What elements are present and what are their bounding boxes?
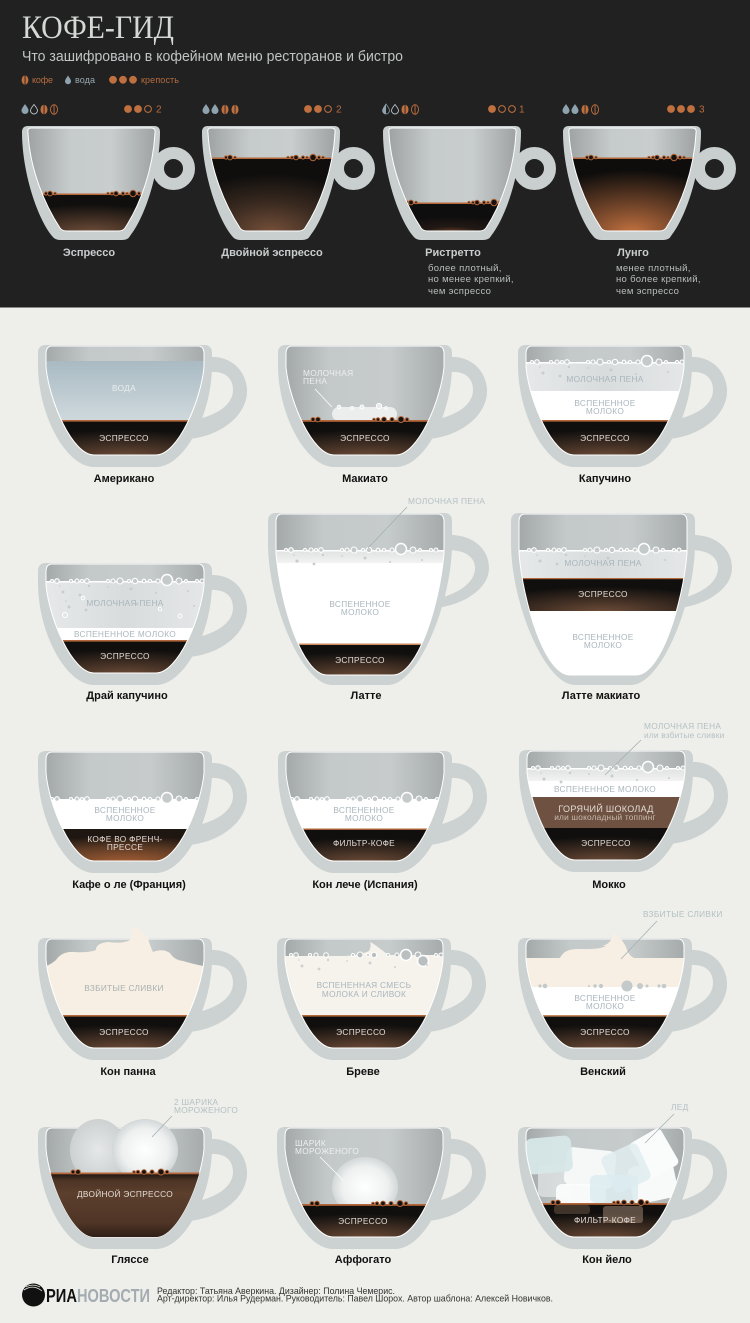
cup: Лунго: [562, 104, 730, 297]
callout: шарик мороженого: ШАРИК: [295, 1138, 326, 1148]
callout: лед: [645, 1102, 689, 1143]
cup drawing: [563, 126, 730, 240]
cup: Аффогато: [277, 1127, 486, 1266]
cup drawing: [511, 513, 732, 685]
callout: молочная пена: МОЛОЧНАЯ ПЕНА: [408, 496, 485, 506]
legend: вода: [75, 75, 95, 85]
footer credits: Арт-директор: Илья Рудерман. Руководитель: Павел Шорох. Автор шаблона: Алексей Новичков.: [157, 1294, 553, 1304]
footer credits: Редактор: Татьяна Аверкина. Дизайнер: Полина Чемерис.: [157, 1286, 395, 1297]
footer logo: НОВОСТИ: [77, 1286, 150, 1306]
layer label: ФИЛЬТР-КОФЕ: [574, 1215, 636, 1225]
name: Лунго: [617, 247, 649, 259]
callout: шарик мороженого: МОРОЖЕНОГО: [295, 1146, 359, 1156]
layer labels: ВСПЕНЕННОЕ МОЛОКО: [74, 629, 176, 639]
cup: Кон йело: [518, 1102, 727, 1266]
title: КОФЕ-ГИД: [22, 10, 174, 46]
layer labels: ВСПЕНЕННОЕ: [94, 805, 156, 815]
legend: кофе: [32, 75, 53, 85]
cup drawing: [277, 938, 486, 1060]
cup drawing: [278, 751, 487, 873]
name: Аффогато: [335, 1254, 391, 1266]
layer labels: КОФЕ ВО ФРЕНЧ-: [87, 834, 163, 844]
cup drawing: [38, 751, 247, 873]
callout: взбитые сливки: [621, 909, 723, 959]
layer labels: [87, 805, 163, 852]
cup: Бреве: [277, 938, 486, 1078]
cup drawing: [38, 1119, 247, 1249]
name: Эспрессо: [63, 247, 115, 259]
callout: шарик мороженого: [295, 1138, 359, 1180]
layer labels: ГОРЯЧИЙ ШОКОЛАД: [558, 803, 654, 814]
name: Латте макиато: [562, 690, 641, 702]
callout: молочная пена или взбитые сливки: или взбитые сливки: [644, 730, 725, 740]
strength rating: 3: [699, 104, 705, 116]
ingredient icons: [382, 104, 418, 114]
description: менее плотный,: [616, 263, 691, 274]
layer labels: ЭСПРЕССО: [100, 651, 150, 661]
name: Бреве: [346, 1066, 380, 1078]
description: чем эспрессо: [428, 286, 491, 297]
cup drawing: [268, 513, 489, 685]
cup: Драй капучино: [38, 563, 247, 702]
layer labels: МОЛОКО: [584, 640, 622, 650]
layer labels: или шоколадный топпинг: [554, 812, 656, 822]
legend: [22, 75, 179, 85]
description: [616, 263, 701, 297]
callout: молочная пена или взбитые сливки: МОЛОЧНАЯ ПЕНА: [644, 721, 721, 731]
layer labels: [554, 784, 656, 848]
layer labels: [99, 383, 149, 443]
callout: молочная пена: [303, 368, 353, 407]
layer labels: МОЛОКО: [106, 813, 144, 823]
name: Драй капучино: [86, 690, 168, 702]
footer logo: РИА: [46, 1286, 77, 1306]
layer labels: МОЛОКО: [586, 1001, 624, 1011]
strength rating: 2: [156, 104, 162, 116]
callout: молочная пена: МОЛОЧНАЯ: [303, 368, 353, 378]
layer labels: ВСПЕНЕННОЕ: [329, 599, 391, 609]
ingredient icons: [562, 104, 598, 114]
ice cubes: [525, 1127, 680, 1223]
description: [428, 263, 514, 297]
cup: Кон панна: [38, 926, 247, 1078]
layer labels: ВСПЕНЕННОЕ: [574, 398, 636, 408]
layer labels: [84, 983, 164, 1037]
layer labels: ЭСПРЕССО: [99, 1027, 149, 1037]
description: более плотный,: [428, 263, 502, 274]
name: Кон йело: [582, 1254, 632, 1266]
layer labels: ВСПЕНЕННОЕ: [574, 993, 636, 1003]
layer labels: МОЛОКА И СЛИВОК: [322, 989, 406, 999]
ice cream balls: [70, 1119, 178, 1181]
cream peak above rim: [603, 933, 624, 946]
strength rating: [304, 104, 342, 116]
name: Венский: [580, 1066, 626, 1078]
layer label: ЭСПРЕССО: [338, 1216, 388, 1226]
layer labels: [317, 980, 412, 1037]
layer labels: МОЛОЧНАЯ ПЕНА: [566, 374, 644, 384]
layer labels: [564, 558, 642, 650]
layer labels: ЭСПРЕССО: [336, 1027, 386, 1037]
callout: молочная пена: [368, 496, 485, 548]
strength rating: [667, 104, 705, 116]
layer labels: ПРЕССЕ: [107, 842, 143, 852]
layer labels: ЭСПРЕССО: [580, 433, 630, 443]
cup drawing: [518, 345, 727, 467]
footer logo: [22, 1284, 150, 1306]
layer labels: ВСПЕНЕННОЕ: [572, 632, 634, 642]
callout: 2 шарика мороженого: [152, 1097, 238, 1137]
strength rating: [488, 104, 525, 116]
layer labels: МОЛОЧНАЯ ПЕНА: [564, 558, 642, 568]
layer labels: ЭСПРЕССО: [335, 655, 385, 665]
name: Латте: [350, 690, 382, 702]
name: Кафе о ле (Франция): [72, 879, 186, 891]
callout: молочная пена или взбитые сливки: [605, 721, 725, 775]
cup: Эспрессо: [22, 104, 189, 259]
name: Гляссе: [111, 1254, 149, 1266]
cup: Кон лече: [278, 751, 487, 891]
ingredient icons: [202, 104, 238, 114]
cup: Латте: [268, 496, 489, 702]
name: Кон лече (Испания): [312, 879, 418, 891]
layer labels: [333, 805, 395, 848]
footer credits: [157, 1286, 553, 1304]
layer labels: МОЛОКО: [341, 607, 379, 617]
strength rating: 1: [519, 104, 525, 116]
layer labels: ВОДА: [112, 383, 136, 393]
cream peak above rim: [122, 926, 148, 942]
cup: Ристретто: [382, 104, 550, 297]
cup drawing: [383, 126, 550, 240]
cup: Американо: [38, 345, 247, 485]
legend: крепость: [141, 75, 179, 85]
name: Американо: [94, 473, 155, 485]
cup: Кафе о ле: [38, 751, 247, 891]
layer labels: ВСПЕНЕННОЕ МОЛОКО: [554, 784, 656, 794]
callout: 2 шарика мороженого: 2 ШАРИКА: [174, 1097, 218, 1107]
name: Двойной эспрессо: [221, 247, 323, 259]
cup: Латте макиато: [511, 513, 732, 702]
layer label: ДВОЙНОЙ ЭСПРЕССО: [77, 1188, 173, 1199]
name: Мокко: [592, 879, 626, 891]
layer labels: ВСПЕНЕННАЯ СМЕСЬ: [317, 980, 412, 990]
callout: лед: ЛЕД: [671, 1102, 689, 1112]
cup drawing: [38, 345, 247, 467]
layer labels: ЭСПРЕССО: [99, 433, 149, 443]
callout: 2 шарика мороженого: МОРОЖЕНОГО: [174, 1105, 238, 1115]
description: но менее крепкий,: [428, 274, 514, 285]
layer labels: [566, 374, 644, 443]
cup drawing: [278, 345, 487, 467]
cup drawing: [38, 563, 247, 685]
strength rating: [124, 104, 162, 116]
layer labels: ВЗБИТЫЕ СЛИВКИ: [84, 983, 164, 993]
description: чем эспрессо: [616, 286, 679, 297]
dark header panel: [0, 0, 750, 308]
cup: Венский: [518, 909, 727, 1078]
layer labels: [329, 599, 391, 665]
cup drawing: [519, 750, 728, 872]
layer labels: ЭСПРЕССО: [580, 1027, 630, 1037]
cup drawing: [518, 933, 727, 1060]
strength rating: 2: [336, 104, 342, 116]
cup drawing: [277, 1127, 486, 1249]
layer labels: МОЛОКО: [586, 406, 624, 416]
description: но более крепкий,: [616, 274, 701, 285]
callout: молочная пена: ПЕНА: [303, 376, 327, 386]
layer labels: МОЛОЧНАЯ ПЕНА: [86, 598, 164, 608]
callout: взбитые сливки: ВЗБИТЫЕ СЛИВКИ: [643, 909, 723, 919]
name: Капучино: [579, 473, 631, 485]
layer labels: ЭСПРЕССО: [581, 838, 631, 848]
name: Ристретто: [425, 247, 481, 259]
cup drawing: [22, 126, 189, 240]
cup: Капучино: [518, 345, 727, 485]
cup: Макиато: [278, 345, 487, 485]
layer labels: ЭСПРЕССО: [578, 589, 628, 599]
layer labels: ФИЛЬТР-КОФЕ: [333, 838, 395, 848]
layer labels: ВСПЕНЕННОЕ: [333, 805, 395, 815]
cup drawing: [518, 1127, 727, 1249]
cup drawing: [202, 126, 369, 240]
cup: Мокко: [519, 721, 728, 891]
subtitle: Что зашифровано в кофейном меню ресторанов и бистро: [22, 48, 403, 65]
layer labels: МОЛОКО: [345, 813, 383, 823]
layer labels: [574, 993, 636, 1037]
name: Кон панна: [100, 1066, 157, 1078]
name: Макиато: [342, 473, 388, 485]
layer label: ЭСПРЕССО: [340, 433, 390, 443]
cup drawing: [38, 926, 247, 1060]
cup: Двойной эспрессо: [202, 104, 369, 259]
cup: Гляссе: [38, 1097, 247, 1266]
layer labels: [74, 598, 176, 661]
ingredient icons: [22, 104, 58, 114]
